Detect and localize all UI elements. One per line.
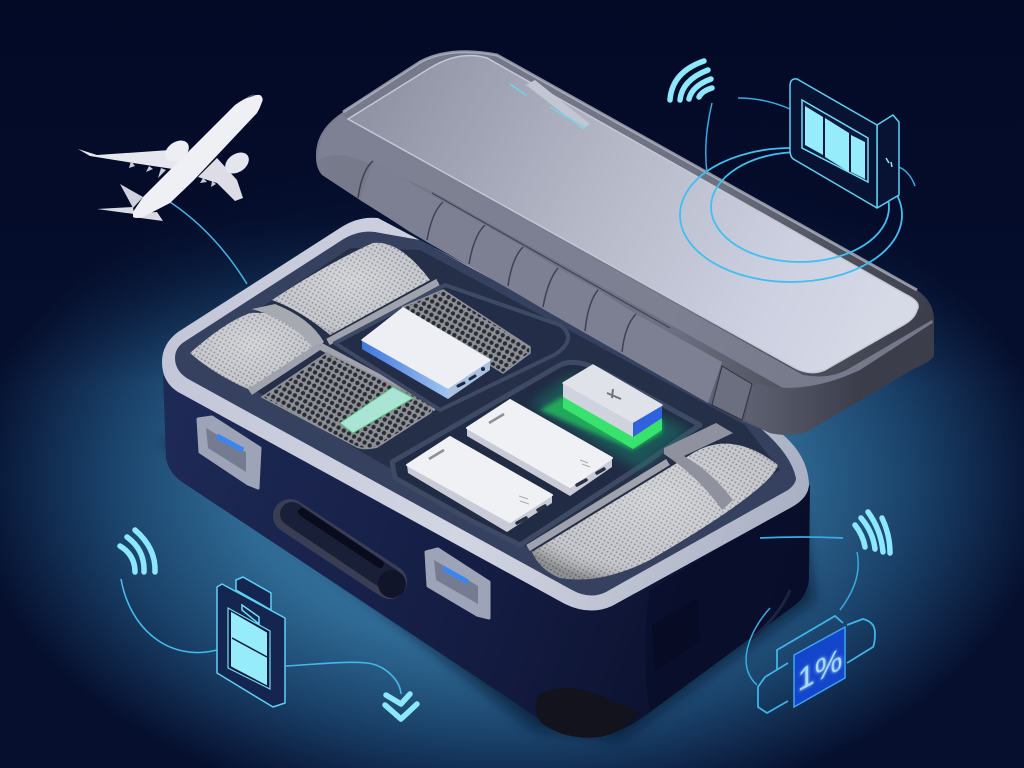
left latch xyxy=(198,417,260,488)
handle slot xyxy=(302,512,380,564)
teal glow xyxy=(530,375,690,470)
green power bank xyxy=(563,365,662,449)
latch blue light xyxy=(443,568,468,582)
brand label xyxy=(429,450,444,459)
inner ring xyxy=(711,152,889,262)
airplane xyxy=(78,95,263,221)
connector line xyxy=(760,537,843,538)
percent label: 1% xyxy=(798,641,842,699)
connector lines xyxy=(121,579,401,694)
suitcase body xyxy=(163,375,810,735)
tailplane xyxy=(97,207,163,221)
suitcase xyxy=(160,218,815,740)
glowing pad xyxy=(340,387,413,433)
fabric dividers xyxy=(250,282,438,408)
fuselage xyxy=(133,95,263,218)
glass notch with cyan light xyxy=(526,80,590,129)
device side xyxy=(877,115,899,208)
hinge end block xyxy=(712,366,752,420)
wifi connector lines xyxy=(706,98,915,186)
brand label xyxy=(489,414,504,423)
latch blue light xyxy=(217,436,243,450)
right compartment tray xyxy=(392,362,700,545)
top xyxy=(467,400,612,487)
interior floor xyxy=(192,248,780,578)
front latch xyxy=(426,549,489,618)
dark inner rim xyxy=(175,232,796,596)
end face xyxy=(448,360,490,399)
blue end xyxy=(633,405,662,437)
device screen xyxy=(802,100,868,182)
inner cell xyxy=(230,610,268,687)
ports xyxy=(458,376,475,386)
power bank blue xyxy=(362,308,490,399)
mesh pocket upper xyxy=(403,290,530,373)
lid xyxy=(316,52,934,435)
cell divider xyxy=(232,638,267,657)
mesh pocket lower xyxy=(262,353,432,448)
battery body xyxy=(217,584,285,707)
side xyxy=(362,340,448,399)
link lines xyxy=(746,552,858,685)
handle end cap xyxy=(378,570,406,598)
wifi icon xyxy=(670,61,712,100)
ports xyxy=(517,506,545,523)
logo mark xyxy=(607,389,621,399)
near wing xyxy=(78,149,185,169)
lid top edge highlight xyxy=(343,52,917,290)
indicator xyxy=(519,496,529,504)
bottom corner bumper xyxy=(535,688,640,738)
center compartment xyxy=(335,285,568,410)
battery icon, bottom left xyxy=(120,530,417,719)
glass panel xyxy=(348,56,918,373)
white power bank front xyxy=(407,437,552,532)
battery cap xyxy=(236,577,271,610)
white power bank back xyxy=(467,400,612,496)
top xyxy=(407,437,552,522)
right corner crease xyxy=(750,590,790,640)
rolled towel right xyxy=(532,444,778,580)
tail fin xyxy=(120,184,143,208)
side detail panel xyxy=(652,598,700,672)
battery cells xyxy=(805,106,865,179)
connector line: plane to suitcase xyxy=(170,202,247,284)
strap right towel xyxy=(664,423,733,510)
rolled towel left xyxy=(190,313,313,390)
green glow pad xyxy=(540,397,662,450)
wireless rings and device, top right xyxy=(670,61,915,282)
top xyxy=(362,308,490,388)
percent panel xyxy=(794,627,845,707)
side xyxy=(563,383,633,437)
indicator xyxy=(580,460,590,467)
side marks xyxy=(886,158,892,167)
dark right face xyxy=(645,495,809,712)
handle outer tube xyxy=(290,516,390,582)
far engine xyxy=(221,148,253,178)
hinge segments xyxy=(358,161,722,403)
lid body xyxy=(316,52,934,435)
wifi waves xyxy=(120,530,155,572)
carrying handle xyxy=(290,512,406,598)
chevrons xyxy=(385,694,417,719)
strap over towels xyxy=(252,304,324,350)
cockpit window xyxy=(248,95,254,97)
lid dark lower face xyxy=(745,322,934,435)
far wing xyxy=(198,158,243,201)
rolled towel upper xyxy=(272,243,430,335)
inner cap xyxy=(242,605,259,624)
suitcase shadow xyxy=(160,440,815,740)
lid upper bevel xyxy=(318,114,934,392)
ports xyxy=(577,469,604,485)
wifi waves xyxy=(855,512,890,553)
near engine xyxy=(161,136,193,166)
top xyxy=(563,365,662,422)
device face xyxy=(790,79,877,208)
battery outline xyxy=(758,616,875,713)
green light band xyxy=(563,397,662,449)
towel divider xyxy=(528,462,668,548)
one percent battery icon, bottom right xyxy=(746,512,890,713)
wing flap fairings xyxy=(129,161,216,187)
silver rim xyxy=(162,218,809,611)
outer ring xyxy=(680,148,902,282)
handle grip xyxy=(292,514,390,580)
